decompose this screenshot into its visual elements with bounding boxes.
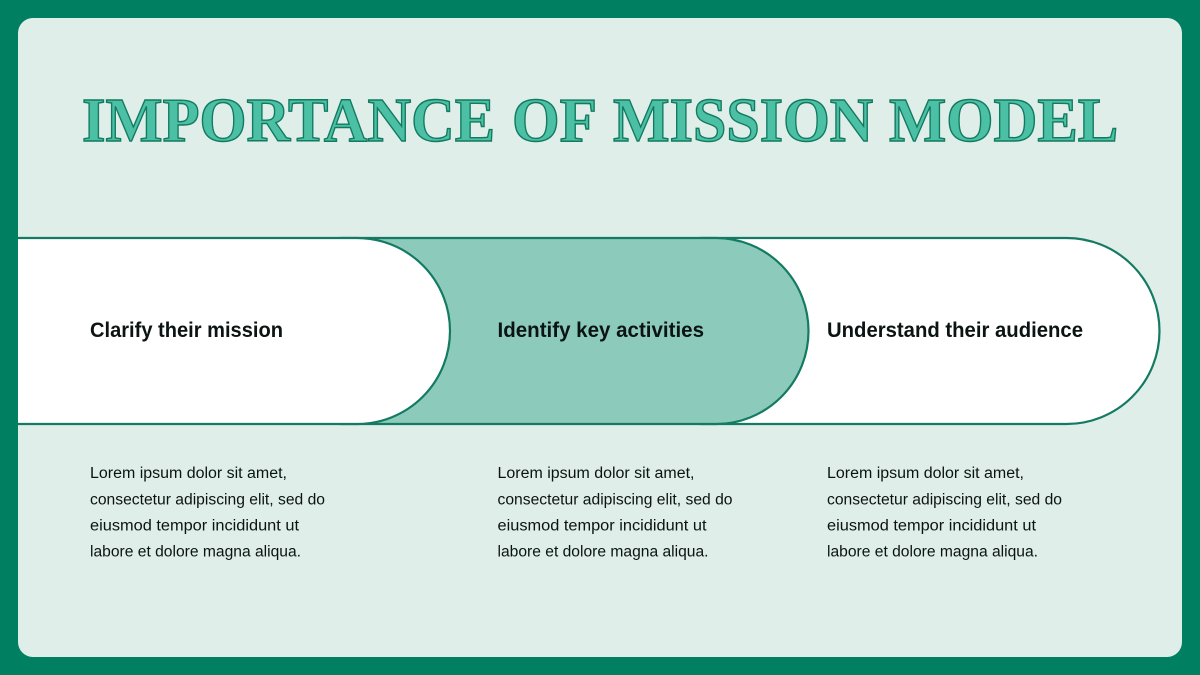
text block: column 1: consectetur adipiscing elit, sed do (90, 492, 325, 508)
heading: understand: Understand their audience (827, 318, 1083, 342)
title: OF (512, 87, 597, 155)
text block: column 3: labore et dolore magna aliqua. (827, 544, 1038, 560)
text block: column 2: labore et dolore magna aliqua. (498, 544, 708, 560)
text block: column 3: consectetur adipiscing elit, sed do (827, 492, 1062, 508)
heading: clarify: Clarify their mission (90, 318, 283, 342)
text block: column 1: Lorem ipsum dolor sit amet, (90, 465, 287, 482)
panel: pill 3 (700, 238, 1160, 424)
text block: column 3 (827, 465, 1062, 560)
text block: column 2 (498, 465, 732, 560)
heading: identify: Identify key activities (498, 318, 704, 342)
text block: column 2: consectetur adipiscing elit, sed do (498, 492, 732, 508)
text block: column 1 (90, 465, 325, 560)
title: MODEL (889, 86, 1118, 155)
text block: column 3: eiusmod tempor incididunt ut (827, 518, 1037, 534)
title: MISSION (613, 87, 873, 155)
panel: pill 2 (340, 238, 808, 424)
title (82, 86, 1118, 155)
text block: column 2: Lorem ipsum dolor sit amet, (498, 465, 694, 482)
text block: column 1: labore et dolore magna aliqua. (90, 544, 301, 560)
title: IMPORTANCE (82, 86, 495, 155)
text block: column 1: eiusmod tempor incididunt ut (90, 518, 300, 534)
panel: pill 1 (18, 238, 450, 424)
text block: column 2: eiusmod tempor incididunt ut (498, 518, 707, 534)
text block: column 3: Lorem ipsum dolor sit amet, (827, 465, 1024, 482)
